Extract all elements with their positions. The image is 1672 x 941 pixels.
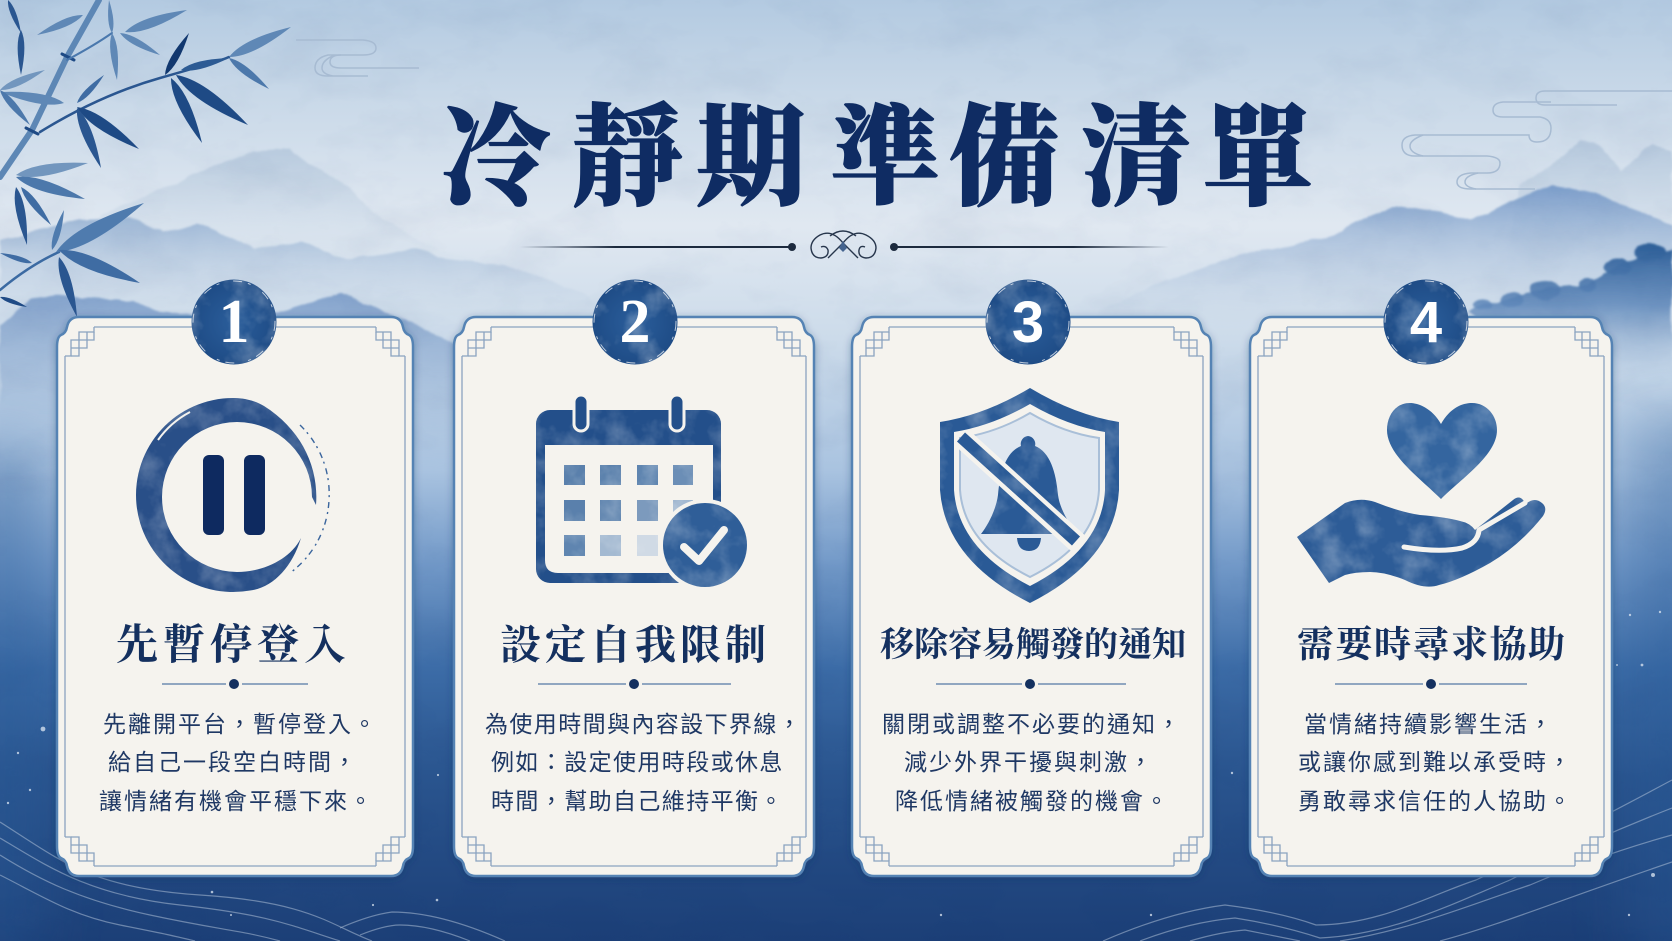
number badge 4: 4 (1410, 290, 1442, 355)
card body text (1298, 711, 1573, 814)
title: 冷靜期準備清單 (441, 70, 1313, 228)
number badge 3: 3 (1012, 290, 1044, 355)
panel: card 1 (57, 280, 413, 876)
icon: calendar with check (536, 395, 751, 591)
heading rule (162, 679, 308, 689)
number badge 2 (592, 280, 678, 364)
heading rule (936, 679, 1126, 689)
card heading: 設定自我限制 (500, 622, 770, 668)
background: left ink mountains (0, 148, 640, 480)
card body text (882, 711, 1182, 814)
background: bamboo branches and leaves (0, 0, 293, 318)
card body text: 為使用時間與內容設下界線， (485, 711, 802, 737)
panel: card 3 (852, 280, 1211, 876)
heading rule (1335, 679, 1527, 689)
number badge 2: 2 (620, 288, 650, 356)
card heading: 先暫停登入 (116, 622, 351, 669)
panel: card 2 (454, 280, 814, 876)
card body text: 時間，幫助自己維持平衡。 (491, 788, 784, 814)
background: right ink mountains and trees (1060, 139, 1672, 410)
number badge 3 (986, 280, 1070, 364)
card body text: 例如：設定使用時段或休息 (491, 749, 784, 775)
number badge 1: 1 (218, 288, 250, 356)
number badge 1 (192, 280, 276, 364)
icon: pause in brush circle (136, 398, 329, 592)
background: bottom wave lines (0, 780, 1672, 941)
card heading: 需要時尋求協助 (1297, 624, 1566, 666)
card body text: 給自己一段空白時間， (108, 749, 358, 775)
icon: shield with muted bell (940, 388, 1119, 603)
card body text: 當情緒持續影響生活， (1304, 711, 1554, 737)
card body text: 勇敢尋求信任的人協助。 (1298, 788, 1573, 814)
card body text: 先離開平台，暫停登入。 (103, 711, 378, 737)
title divider ornament (520, 231, 1169, 258)
card body text: 關閉或調整不必要的通知， (882, 711, 1182, 737)
background: left cloud lines (296, 40, 419, 76)
card body text: 或讓你感到難以承受時， (1298, 749, 1573, 775)
icon: hand holding heart (1297, 403, 1545, 587)
background: white specks (7, 611, 1661, 916)
number badge 4 (1384, 280, 1468, 364)
panel: card 4 (1250, 280, 1612, 876)
card body text: 減少外界干擾與刺激， (904, 749, 1154, 775)
card body text (485, 711, 802, 814)
card body text (99, 711, 378, 814)
background: right cloud lines (1402, 91, 1672, 189)
card body text: 降低情緒被觸發的機會。 (895, 788, 1170, 814)
background: darker side margins (0, 420, 1672, 941)
heading rule (538, 679, 731, 689)
card body text: 讓情緒有機會平穩下來。 (99, 788, 374, 814)
card heading: 移除容易觸發的通知 (880, 626, 1186, 664)
